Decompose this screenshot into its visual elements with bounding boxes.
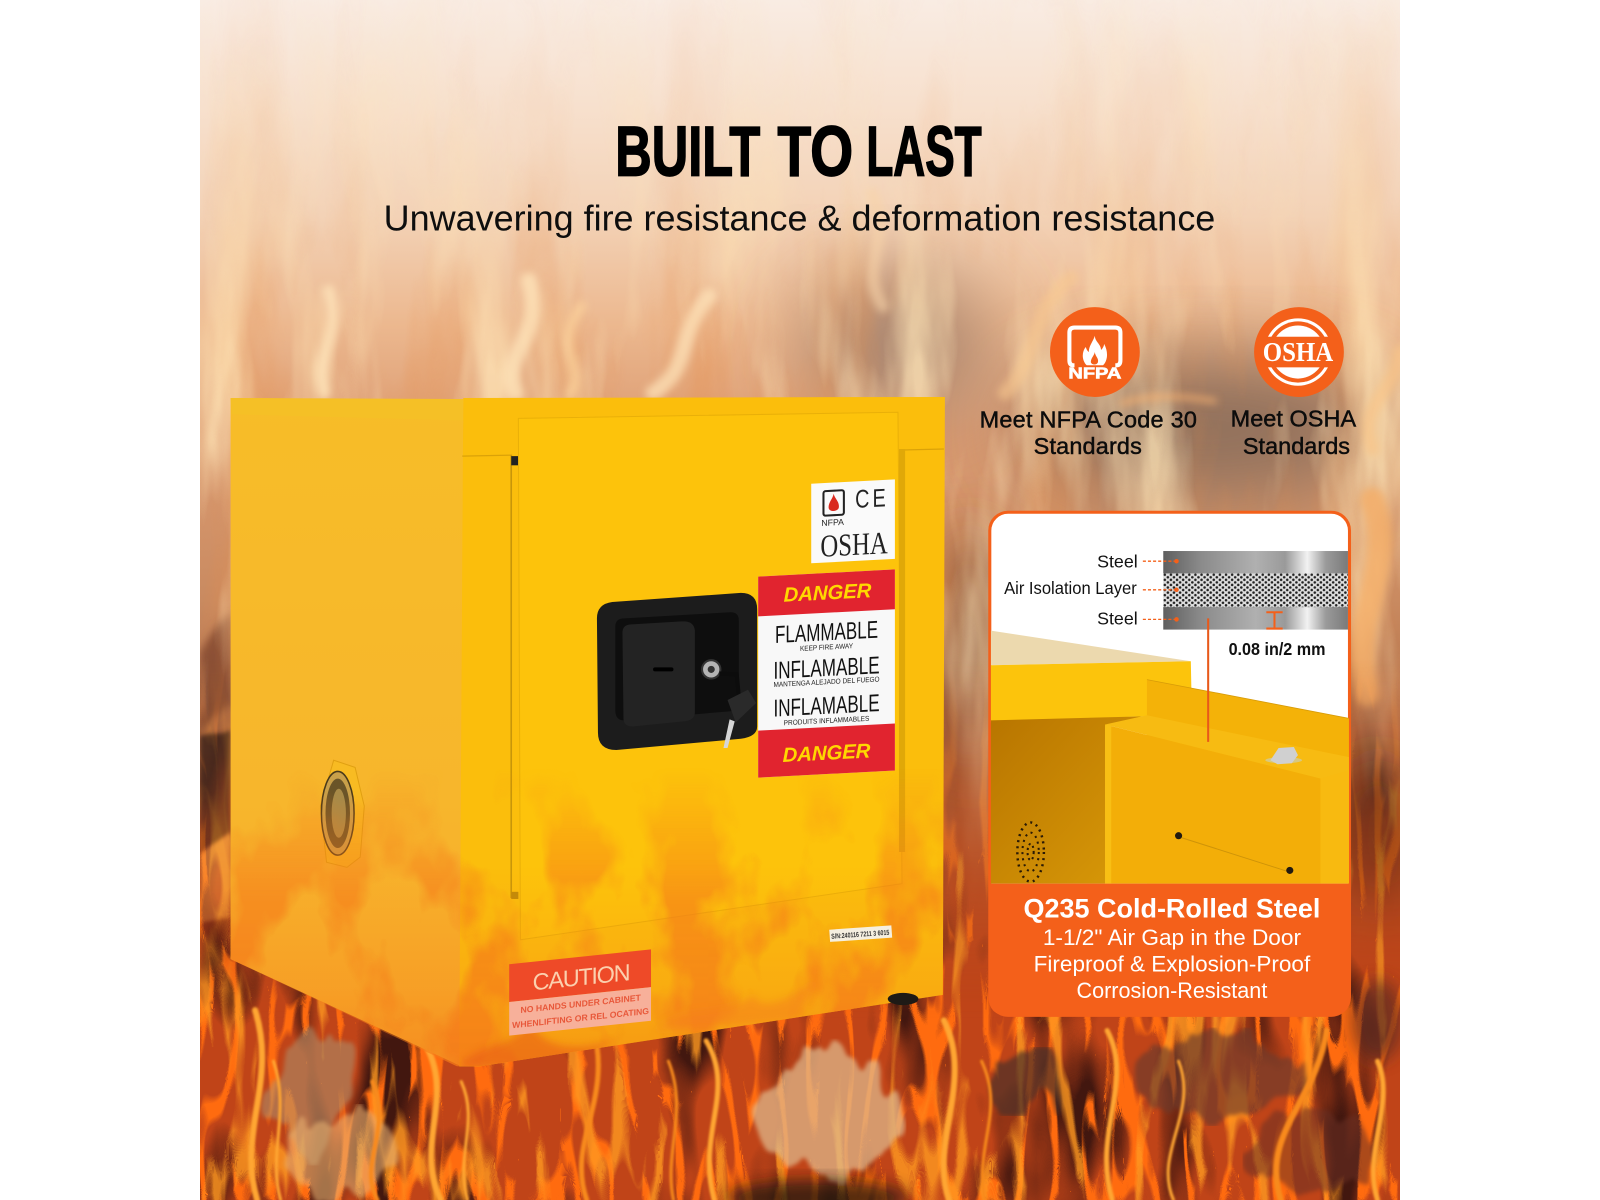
title [615,112,982,191]
danger label [758,569,895,778]
danger label: INFLAMABLE [773,652,880,685]
thickness marker [1266,612,1283,629]
danger label: DANGER [784,580,872,607]
caption: OSHA standard [1231,406,1356,459]
caption: NFPA standard [980,407,1197,459]
orange caption band [989,884,1350,1015]
caption: OSHA standard: Standards [1243,433,1350,459]
title: TO [778,112,853,191]
caption features: Fireproof & Explosion-Proof [1034,951,1311,976]
background: fire and smoke photo [200,0,1418,1200]
leader line to door [1207,618,1209,742]
pale flame wisps [201,23,1400,783]
caption features [1034,925,1311,1003]
fire reflection on cabinet [231,791,944,1066]
layer label: air isolation: Air Isolation Layer [1004,578,1137,598]
side knockout fitting [320,760,364,867]
certification label: E [872,484,886,513]
caution label: CAUTION [533,959,631,995]
danger label: FLAMMABLE [775,617,878,649]
caution label [509,949,651,1036]
bright flame tongues, upper area [322,194,1400,694]
smoke and charred patches [200,276,1418,969]
caption features: 1-1/2" Air Gap in the Door [1043,925,1302,950]
badge: NFPA: NFPA [1068,366,1121,383]
orange flame strands, lower area [251,1010,1383,1200]
cabinet side face [231,398,463,1066]
door close-up photo [991,631,1349,884]
certification label [811,479,895,564]
serial number sticker [829,925,892,942]
danger label: DANGER [783,740,871,767]
caption: NFPA standard: Meet NFPA Code 30 [980,407,1197,433]
serial number sticker: S/N:240116 7211 3 6015 [831,929,890,941]
badge: NFPA [1050,307,1140,397]
caption heading: Q235 Cold-Rolled Steel [1023,893,1320,923]
caption features: Corrosion-Resistant [1077,978,1268,1003]
title: LAST [866,112,982,191]
danger label: KEEP FIRE AWAY [800,642,853,653]
certification label: NFPA [821,517,844,528]
vent holes [1017,822,1044,882]
cabinet front face [459,397,945,1066]
cabinet door [518,412,902,940]
layer label: steel bottom: Steel [1097,608,1138,628]
badge: OSHA: OSHA [1263,336,1333,367]
certification label: OSHA [820,525,888,564]
danger label: PRODUITS INFLAMMABLES [784,715,870,727]
cabinet foot [888,993,918,1005]
caution label: WHENLIFTING OR REL OCATING [512,1006,649,1030]
danger label: INFLAMABLE [773,690,880,723]
door handle and lock [597,593,757,750]
product: yellow flammable cabinet [231,397,945,1071]
layer label: steel top: Steel [1097,551,1138,571]
caption: OSHA standard: Meet OSHA [1231,406,1356,432]
lower fire [200,687,1400,1200]
certification label: C [855,485,869,514]
dimension label: 0.08 in/2 mm [1229,639,1326,659]
caution label: NO HANDS UNDER CABINET [520,992,641,1015]
badge: OSHA [1254,307,1344,397]
pale ghost flames and ember rocks [263,980,1403,1200]
keys [719,673,756,748]
panel card [990,512,1349,1015]
danger label: MANTENGA ALEJADO DEL FUEGO [773,675,880,689]
subtitle: Unwavering fire resistance & deformation resistance [384,198,1215,239]
title: BUILT [615,112,760,191]
panel: door construction [989,512,1350,1015]
caption: NFPA standard: Standards [1034,433,1142,459]
steel layers diagram [1143,551,1348,742]
